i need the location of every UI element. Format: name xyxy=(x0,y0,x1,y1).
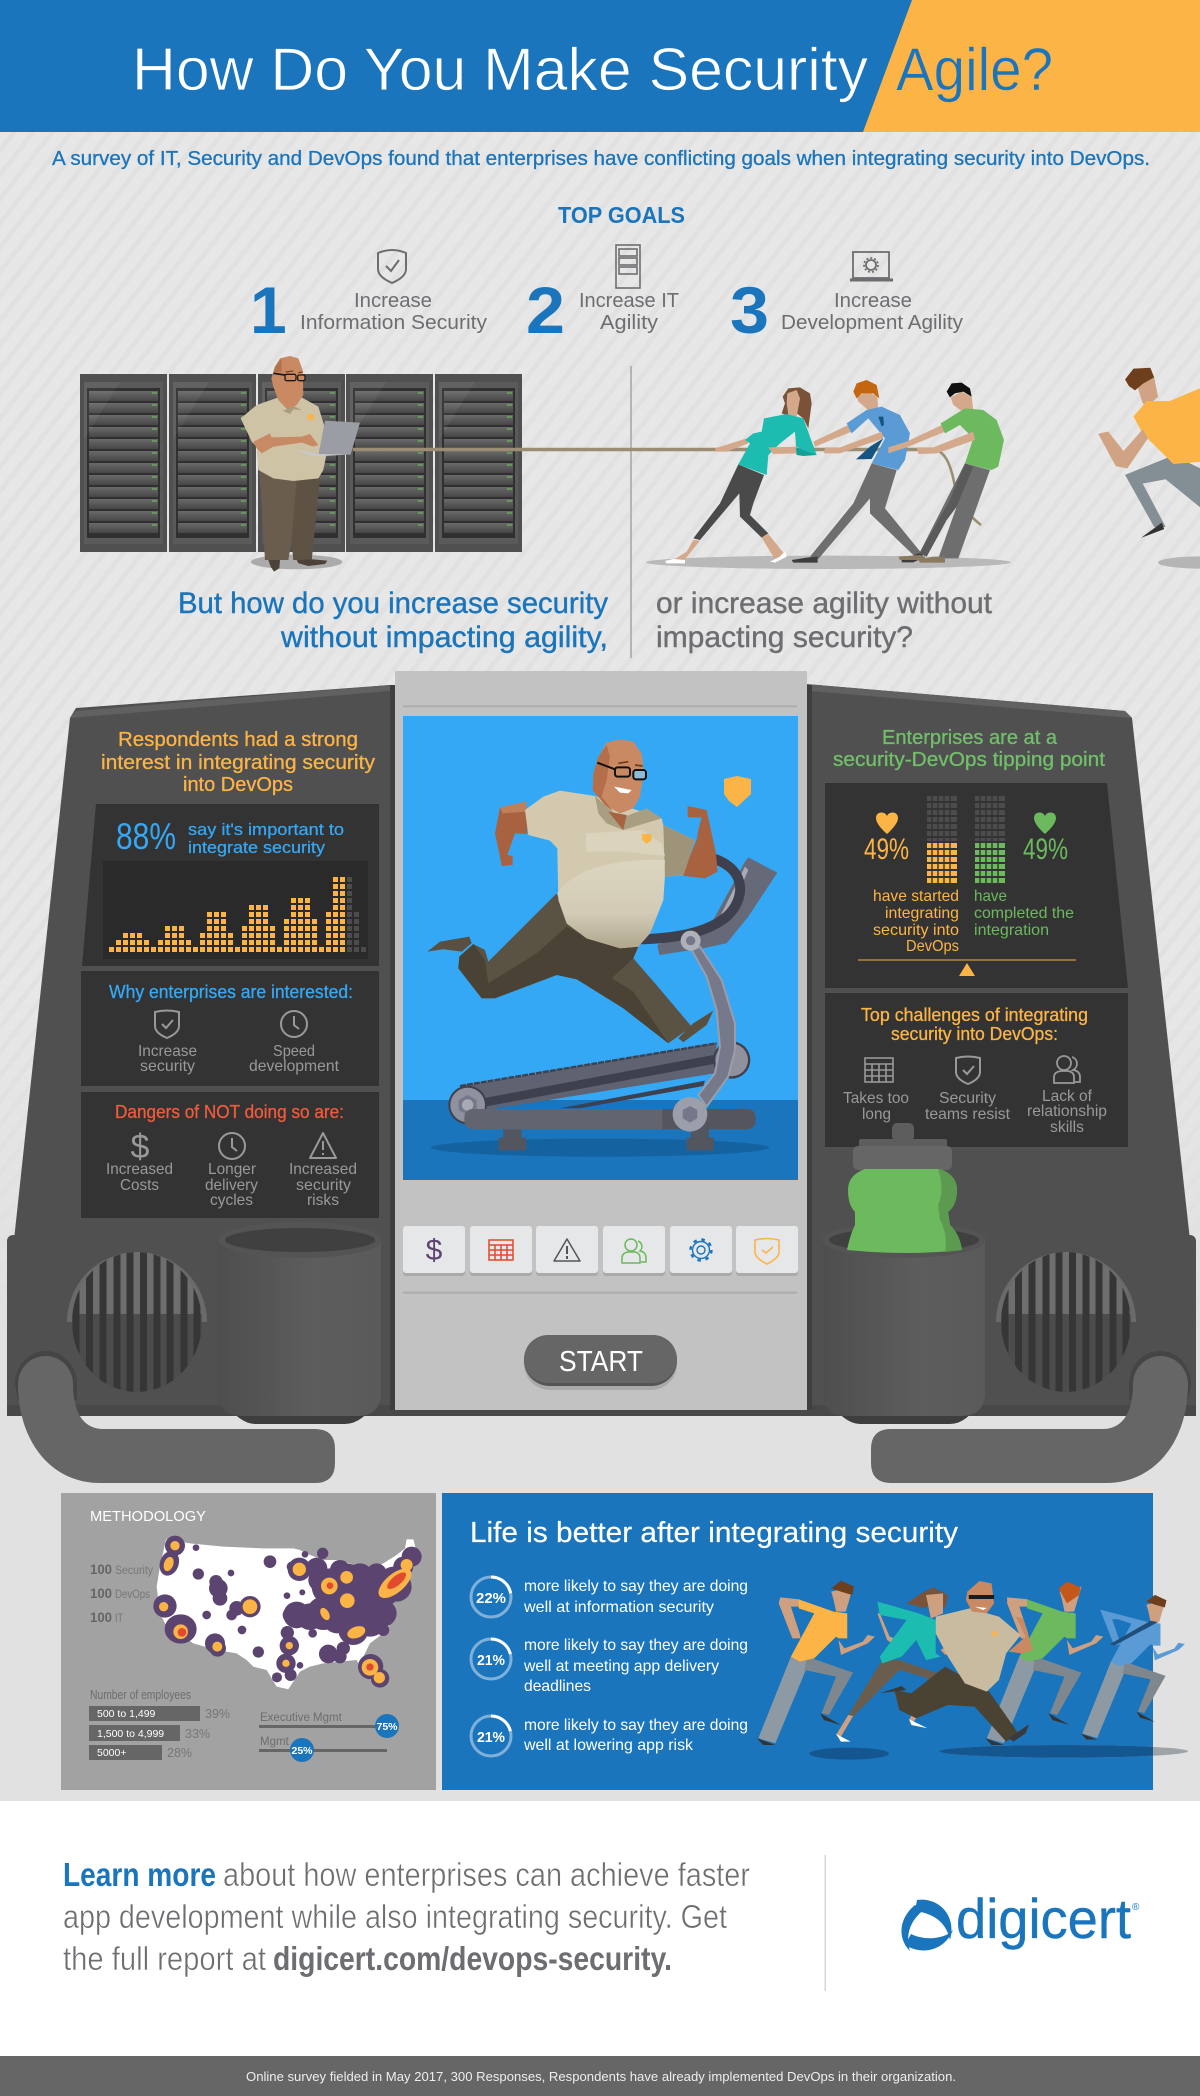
start button: START xyxy=(559,1346,643,1378)
learn more text: Learn more xyxy=(63,1856,216,1893)
heading: strong interest: into DevOps xyxy=(183,774,293,796)
panel: life is better xyxy=(442,1493,1153,1790)
panel: top challenges: Top challenges of integrating xyxy=(861,1005,1088,1025)
management sliders: Executive Mgmt xyxy=(260,1712,343,1724)
panel: top challenges: teams resist xyxy=(925,1106,1011,1123)
speaker left xyxy=(67,1250,207,1394)
goal 3: 3 xyxy=(730,273,769,347)
respondent counts: 100 xyxy=(90,1609,112,1625)
panel: tipping point gauge: integrating xyxy=(885,905,959,922)
stat: 22 percent xyxy=(471,1577,748,1617)
handlebar right xyxy=(871,1351,1191,1483)
icon: shield xyxy=(956,1056,980,1084)
learn more text: the full report at xyxy=(63,1940,266,1977)
logo: digicert: digicert xyxy=(956,1887,1131,1950)
management sliders xyxy=(259,1712,399,1762)
dot column: completed xyxy=(975,796,1005,883)
start button xyxy=(524,1335,677,1390)
title accent word: Agile? xyxy=(896,36,1053,103)
panel: tipping point gauge: security into xyxy=(873,922,959,939)
runner: blue shirt xyxy=(1081,1595,1185,1740)
goal 2 xyxy=(526,245,679,347)
question: increase security: without impacting agility, xyxy=(280,621,608,654)
stat: 22 percent: well at information security xyxy=(523,1599,714,1616)
button: dollar: $ xyxy=(426,1234,443,1267)
illustration: tug of war team xyxy=(646,380,1011,569)
panel: tipping point gauge: 49% xyxy=(864,833,909,866)
panel: 88 percent display: say it's important to xyxy=(188,820,344,839)
cup holder right xyxy=(822,1222,986,1424)
illustration: runner joining team xyxy=(1098,368,1200,569)
goal 3: Increase xyxy=(834,290,912,312)
heading: tipping point: Enterprises are at a xyxy=(882,727,1058,749)
top goals heading: TOP GOALS xyxy=(558,202,685,228)
panel: dangers of not doing so: cycles xyxy=(210,1192,253,1209)
panel: why enterprises are interested: development xyxy=(249,1058,340,1075)
icon: green heart xyxy=(1034,812,1056,834)
title: How Do You Make Security xyxy=(132,36,868,103)
server racks xyxy=(80,374,522,552)
panel: 88 percent display xyxy=(82,804,379,966)
icon: dollar: $ xyxy=(131,1128,150,1166)
panel: dangers of not doing so: Dangers of NOT doing so are: xyxy=(115,1102,344,1122)
button: shield xyxy=(736,1226,798,1276)
goal 1: Increase xyxy=(354,290,432,312)
respondent counts: Security xyxy=(115,1565,153,1577)
goal 2: Increase IT xyxy=(579,290,679,312)
heading: tipping point: security-DevOps tipping point xyxy=(833,749,1105,771)
man pulling, green shirt xyxy=(888,383,1004,563)
panel: top challenges: Lack of xyxy=(1042,1088,1093,1105)
employee size bars: 28% xyxy=(167,1746,192,1760)
panel: dangers of not doing so: Increased xyxy=(289,1161,357,1178)
heading: strong interest: interest in integrating security xyxy=(101,752,375,774)
icon: server xyxy=(616,245,640,288)
learn more text xyxy=(63,1856,750,1977)
panel: why enterprises are interested: Speed xyxy=(273,1043,315,1060)
header banner xyxy=(0,0,1200,132)
goal 3 xyxy=(730,252,963,347)
employee size bars: 39% xyxy=(205,1707,230,1721)
stat: 21 percent delivery: deadlines xyxy=(524,1678,591,1695)
icon: clock xyxy=(219,1133,245,1159)
goal 1: Information Security xyxy=(300,312,487,334)
panel: top challenges: relationship xyxy=(1027,1103,1107,1120)
panel: why enterprises are interested: security xyxy=(140,1058,195,1075)
icon: calendar xyxy=(865,1058,893,1082)
learn more text: about how enterprises can achieve faster xyxy=(223,1856,750,1893)
runner: security man xyxy=(880,1581,1033,1742)
panel: tipping point gauge xyxy=(825,783,1128,988)
employee size bars: 33% xyxy=(185,1727,210,1741)
button: warning xyxy=(536,1226,598,1276)
respondent counts: IT xyxy=(115,1613,123,1625)
icon: people xyxy=(1054,1056,1080,1083)
panel: top challenges: Security xyxy=(939,1090,996,1107)
employee size bars: Number of employees xyxy=(90,1688,191,1702)
water bottle xyxy=(847,1123,962,1253)
speaker right xyxy=(996,1250,1136,1394)
goal 3: Development Agility xyxy=(781,312,963,334)
respondent counts: 100 xyxy=(90,1585,112,1601)
heading: strong interest: Respondents had a strong xyxy=(118,729,358,751)
button: people xyxy=(603,1226,665,1276)
stat: 21 percent delivery: well at meeting app delivery xyxy=(523,1658,719,1675)
illustration: security man with laptop xyxy=(241,356,360,572)
icon: shield xyxy=(378,250,406,283)
respondent counts: 100 xyxy=(90,1561,112,1577)
stat: 22 percent: 22% xyxy=(476,1590,506,1607)
stat: 21 percent risk: more likely to say they are doing xyxy=(524,1717,748,1734)
dot column: started xyxy=(927,796,957,883)
divider xyxy=(630,366,632,658)
heading: life is better: Life is better after integrating security xyxy=(470,1517,959,1549)
stat: 21 percent risk xyxy=(471,1716,748,1756)
panel: top challenges: skills xyxy=(1050,1119,1084,1136)
stat: 21 percent delivery: 21% xyxy=(477,1652,505,1669)
management sliders: 25% xyxy=(291,1745,313,1757)
heading: methodology: METHODOLOGY xyxy=(90,1508,206,1525)
panel: 88 percent display: 88% xyxy=(116,816,176,857)
panel: dangers of not doing so: delivery xyxy=(205,1177,258,1194)
icon: shield xyxy=(155,1010,179,1038)
heading: tipping point xyxy=(833,727,1105,771)
employee size bars: 500 to 1,499 xyxy=(97,1708,156,1720)
treadmill machine xyxy=(431,857,777,1157)
employee size bars: 1,500 to 4,999 xyxy=(97,1728,164,1740)
panel: top challenges: long xyxy=(862,1106,891,1123)
learn more text: app development while also integrating security. Get xyxy=(63,1898,727,1935)
button: gear xyxy=(670,1226,732,1276)
woman pulling xyxy=(665,387,817,563)
goal 2: Agility xyxy=(600,312,658,334)
panel: top challenges: security into DevOps: xyxy=(891,1024,1058,1044)
dot bar chart xyxy=(103,861,368,959)
button: dollar xyxy=(403,1226,465,1276)
US heat map xyxy=(153,1536,422,1689)
treadmill base xyxy=(7,1235,1196,1416)
question: increase agility: impacting security? xyxy=(656,621,913,654)
cup holder left xyxy=(218,1222,382,1424)
panel: dangers of not doing so: Increased xyxy=(106,1161,173,1178)
logo: digicert: ® xyxy=(1132,1902,1140,1913)
panel: why enterprises are interested xyxy=(81,971,379,1086)
icon: orange heart xyxy=(876,812,898,834)
panel: left console xyxy=(14,685,396,1410)
stat: 21 percent risk: 21% xyxy=(477,1729,505,1746)
handlebar left xyxy=(15,1351,335,1483)
icon: laptop with gear xyxy=(850,252,893,280)
respondent counts xyxy=(90,1561,153,1625)
running man xyxy=(427,739,718,1043)
runner: green shirt xyxy=(985,1582,1103,1745)
panel: tipping point gauge: completed the xyxy=(974,905,1074,922)
panel: top challenges xyxy=(825,993,1128,1147)
stat: 21 percent risk: well at lowering app risk xyxy=(523,1737,694,1754)
stat: 22 percent: more likely to say they are doing xyxy=(524,1578,748,1595)
panel: tipping point gauge: integration xyxy=(974,922,1049,939)
screen: treadmill scene xyxy=(403,716,798,1180)
panel: dangers of not doing so: Costs xyxy=(120,1177,159,1194)
employee size bars: 5000+ xyxy=(97,1747,126,1759)
runner: yellow shirt xyxy=(757,1581,875,1745)
question: increase security: But how do you increase security xyxy=(178,587,608,620)
learn more text: digicert.com/devops-security. xyxy=(273,1940,672,1977)
goal 2: 2 xyxy=(526,273,565,347)
footnote bar xyxy=(0,2056,1200,2096)
management sliders: Mgmt xyxy=(260,1736,290,1748)
runner: teal shirt xyxy=(836,1587,965,1742)
icon: clock xyxy=(281,1011,307,1037)
panel: tipping point gauge: 49% xyxy=(1023,833,1068,866)
panel: dangers of not doing so: Longer xyxy=(208,1161,257,1178)
button: calendar xyxy=(470,1226,532,1276)
panel: tipping point gauge: have started xyxy=(873,888,959,905)
panel: why enterprises are interested: Why enterprises are interested: xyxy=(109,982,353,1002)
icon: warning xyxy=(310,1133,336,1158)
panel: dangers of not doing so: risks xyxy=(307,1192,339,1209)
control buttons xyxy=(403,1226,798,1276)
goal 1: 1 xyxy=(250,273,287,347)
goal 1 xyxy=(250,250,487,347)
panel: dangers of not doing so: security xyxy=(296,1177,351,1194)
heading: strong interest xyxy=(101,729,375,796)
respondent counts: DevOps xyxy=(115,1589,150,1601)
illustration: running team xyxy=(757,1581,1188,1760)
panel: 88 percent display: integrate security xyxy=(188,838,326,857)
footer call to action xyxy=(0,1801,1200,2056)
question: increase agility: or increase agility without xyxy=(656,587,993,620)
panel: methodology xyxy=(61,1493,436,1790)
panel: tipping point gauge: have xyxy=(974,888,1007,905)
question: increase agility xyxy=(656,587,993,654)
management sliders: 75% xyxy=(376,1721,398,1733)
panel: top challenges: Takes too xyxy=(843,1090,909,1107)
icon: floating shield xyxy=(724,776,751,807)
footnote bar: Online survey fielded in May 2017, 300 Responses, Respondents have already implemented DevOps in their organization. xyxy=(246,2069,956,2084)
question: increase security xyxy=(178,587,608,654)
man pulling, blue shirt xyxy=(792,380,923,563)
survey intro: A survey of IT, Security and DevOps found that enterprises have conflicting goals when integrating security into DevOps. xyxy=(52,148,1150,170)
center display console xyxy=(395,671,807,1410)
panel: why enterprises are interested: Increase xyxy=(138,1043,197,1060)
panel: dangers of not doing so xyxy=(81,1092,379,1218)
stat: 21 percent delivery: more likely to say they are doing xyxy=(524,1637,748,1654)
panel: right console xyxy=(806,684,1190,1410)
panel: tipping point gauge: DevOps xyxy=(906,938,959,955)
employee size bars xyxy=(89,1688,230,1760)
rope xyxy=(353,450,981,525)
stat: 21 percent delivery xyxy=(471,1637,748,1695)
